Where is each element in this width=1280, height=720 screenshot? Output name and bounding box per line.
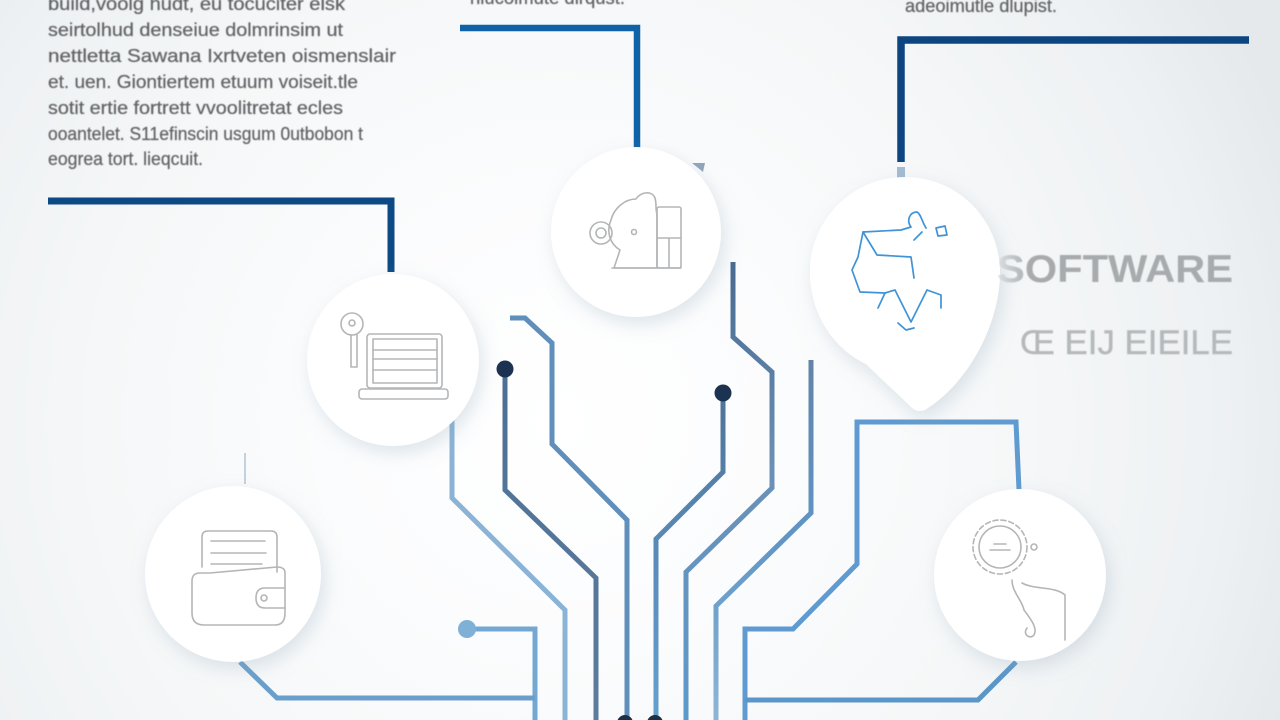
- icon: gear and cable: [973, 520, 1065, 640]
- node: dark dot left: [496, 360, 514, 378]
- text block: top left description: [48, 0, 396, 169]
- heading: SOFTWARE: SOFTWARE: [997, 248, 1233, 291]
- node: bottom dark dot left: [617, 715, 633, 720]
- text block: top left description: et. uen. Giontiertem etuum voiseit.tle: [48, 72, 358, 92]
- circle: laptop and key: [307, 274, 479, 446]
- circuit traces: [240, 163, 1019, 720]
- node: light blue dot: [458, 620, 476, 638]
- connector: right bracket: [901, 40, 1249, 184]
- icon: laptop and key: [341, 313, 448, 399]
- icon: camera figure: [590, 193, 681, 268]
- text block: top left description: sotit ertie fortrett vvoolitretat ecles: [48, 98, 343, 118]
- circle: map teardrop: [810, 177, 1000, 411]
- icon: blue map outline: [852, 212, 947, 330]
- icon: wallet: [192, 531, 285, 625]
- text block: top left description: eogrea tort. lieqcuit.: [48, 149, 203, 169]
- text block: top left description: ooantelet. S11efinscin usgum 0utbobon t: [48, 124, 363, 144]
- circle: virus and cable: [934, 489, 1106, 661]
- circle: wallet: [145, 486, 321, 662]
- node: dark dot right: [714, 384, 732, 402]
- subheading: Œ EIJ EIEILE: [1020, 324, 1233, 362]
- circle: camera: [551, 147, 721, 317]
- connector: left bracket: [48, 201, 391, 272]
- node: bottom dark dot right: [647, 715, 663, 720]
- text block: top left description: seirtolhud denseiue dolmrinsim ut: [48, 20, 343, 40]
- text block: top left description: nettletta Sawana Ixrtveten oismenslair: [48, 46, 396, 66]
- connector: centre bracket: [460, 28, 637, 148]
